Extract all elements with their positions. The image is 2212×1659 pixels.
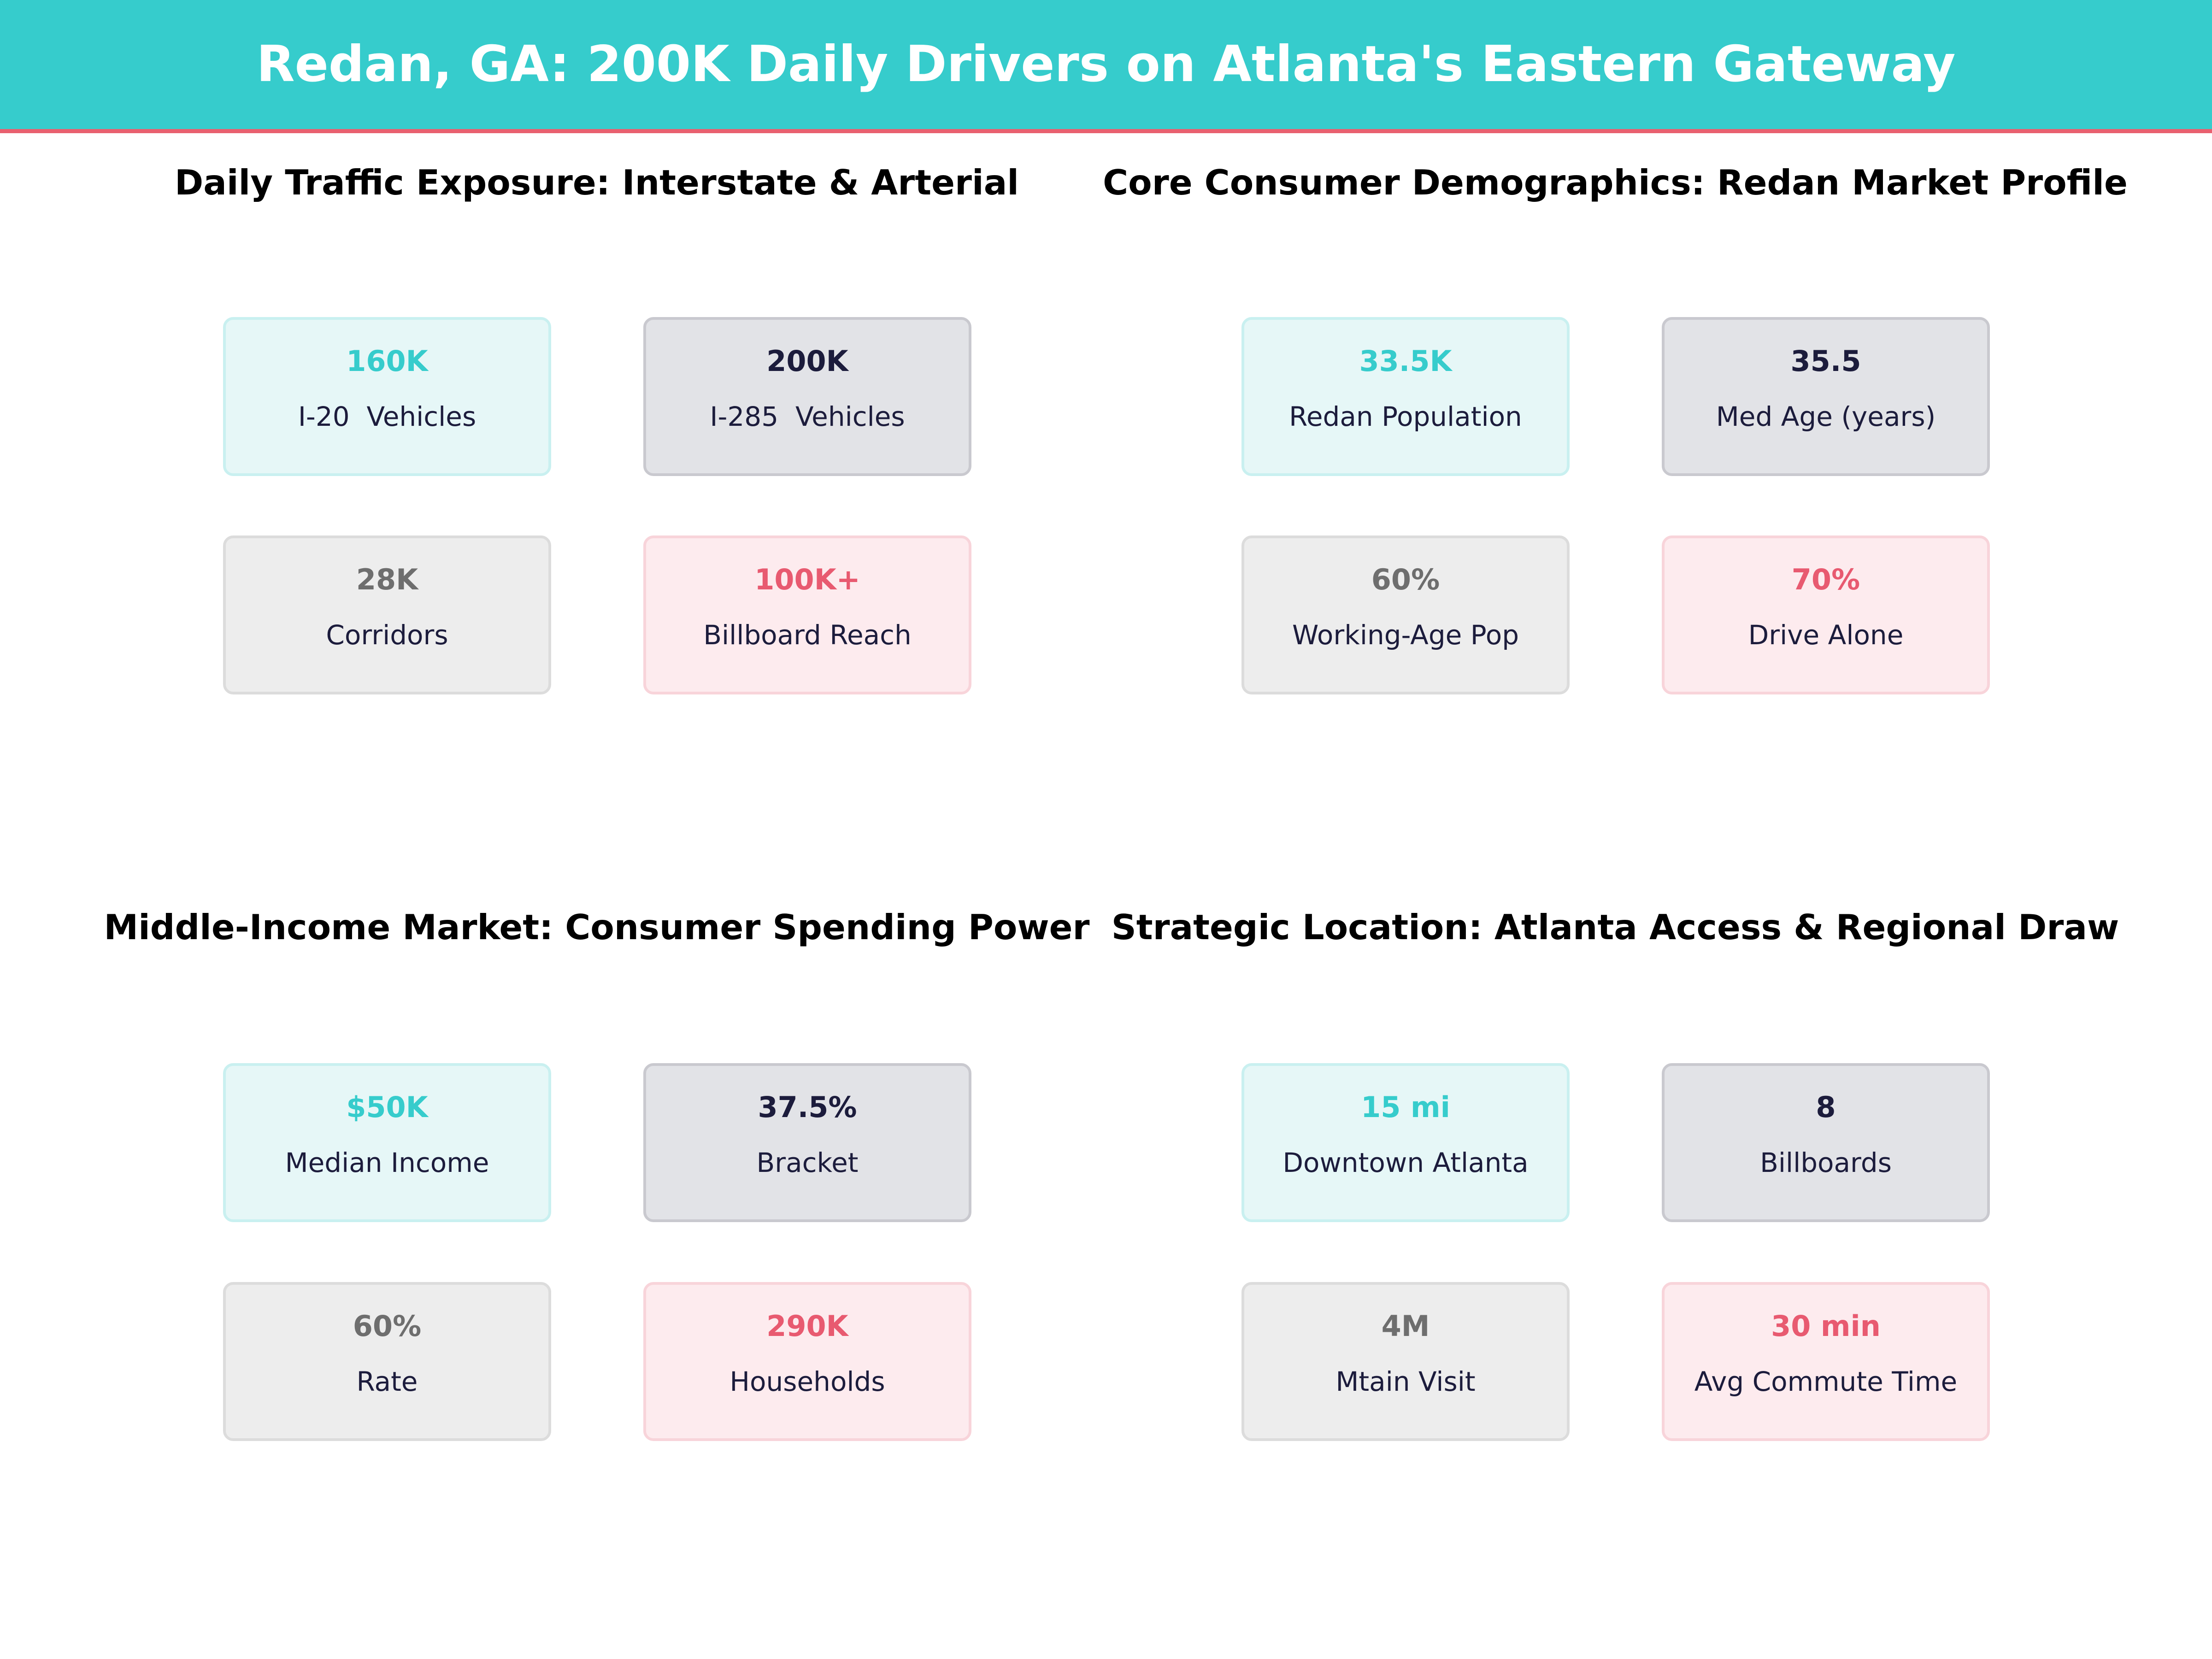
card: 60% rate <box>223 1282 551 1441</box>
card: 100K+: 100K+ <box>754 563 860 596</box>
section title: demographics: Core Consumer Demographics: Redan Market Profile <box>1103 162 2128 203</box>
card: 290K: 290K <box>766 1309 848 1343</box>
card: 70%: 70% <box>1792 563 1860 596</box>
card: 37.5%: Bracket <box>756 1147 858 1178</box>
card: $50K <box>223 1063 551 1222</box>
card: 60% rate: 60% <box>353 1309 421 1343</box>
card: 35.5: 35.5 <box>1791 344 1861 378</box>
card: $50K: $50K <box>346 1090 428 1124</box>
card: 8 <box>1662 1063 1990 1222</box>
card: 33.5K <box>1241 317 1570 476</box>
card: 160K <box>223 317 551 476</box>
card: 100K+ <box>643 535 971 694</box>
card: 4M: 4M <box>1382 1309 1430 1343</box>
card: 30 min: Avg Commute Time <box>1694 1366 1957 1397</box>
card: 4M <box>1241 1282 1570 1441</box>
header banner: Redan, GA: 200K Daily Drivers on Atlanta's Eastern Gateway <box>256 35 1955 93</box>
card: 33.5K: Redan Population <box>1289 401 1522 432</box>
card: 60% working: Working-Age Pop <box>1292 619 1519 651</box>
card: 15 mi: Downtown Atlanta <box>1282 1147 1529 1178</box>
card: 28K <box>223 535 551 694</box>
section title: income: Middle-Income Market: Consumer Spending Power <box>104 907 1090 947</box>
card: 200K: 200K <box>766 344 848 378</box>
card: 290K: Households <box>729 1366 885 1397</box>
card: 60% working: 60% <box>1371 563 1440 596</box>
card: 35.5: Med Age (years) <box>1716 401 1936 432</box>
card: 15 mi: 15 mi <box>1361 1090 1450 1124</box>
card: 160K: I-20 Vehicles <box>298 401 476 432</box>
card: 160K: 160K <box>346 344 428 378</box>
card: 60% rate: Rate <box>357 1366 418 1397</box>
card: 70% <box>1662 535 1990 694</box>
card: 290K <box>643 1282 971 1441</box>
card: 30 min: 30 min <box>1771 1309 1881 1343</box>
card: $50K: Median Income <box>285 1147 489 1178</box>
card: 15 mi <box>1241 1063 1570 1222</box>
card: 28K: 28K <box>356 563 418 596</box>
header banner <box>0 0 2212 133</box>
card: 37.5%: 37.5% <box>758 1090 857 1124</box>
card: 4M: Mtain Visit <box>1335 1366 1476 1397</box>
card: 200K <box>643 317 971 476</box>
card: 8: 8 <box>1816 1090 1836 1124</box>
card: 8: Billboards <box>1760 1147 1892 1178</box>
card: 30 min <box>1662 1282 1990 1441</box>
section title: location: Strategic Location: Atlanta Access & Regional Draw <box>1112 907 2119 947</box>
card: 100K+: Billboard Reach <box>703 619 912 651</box>
card: 28K: Corridors <box>326 619 448 651</box>
card: 33.5K: 33.5K <box>1359 344 1452 378</box>
section title: traffic: Daily Traffic Exposure: Interstate & Arterial <box>175 162 1019 203</box>
card: 70%: Drive Alone <box>1748 619 1903 651</box>
card: 37.5% <box>643 1063 971 1222</box>
card: 60% working <box>1241 535 1570 694</box>
card: 35.5 <box>1662 317 1990 476</box>
card: 200K: I-285 Vehicles <box>710 401 905 432</box>
